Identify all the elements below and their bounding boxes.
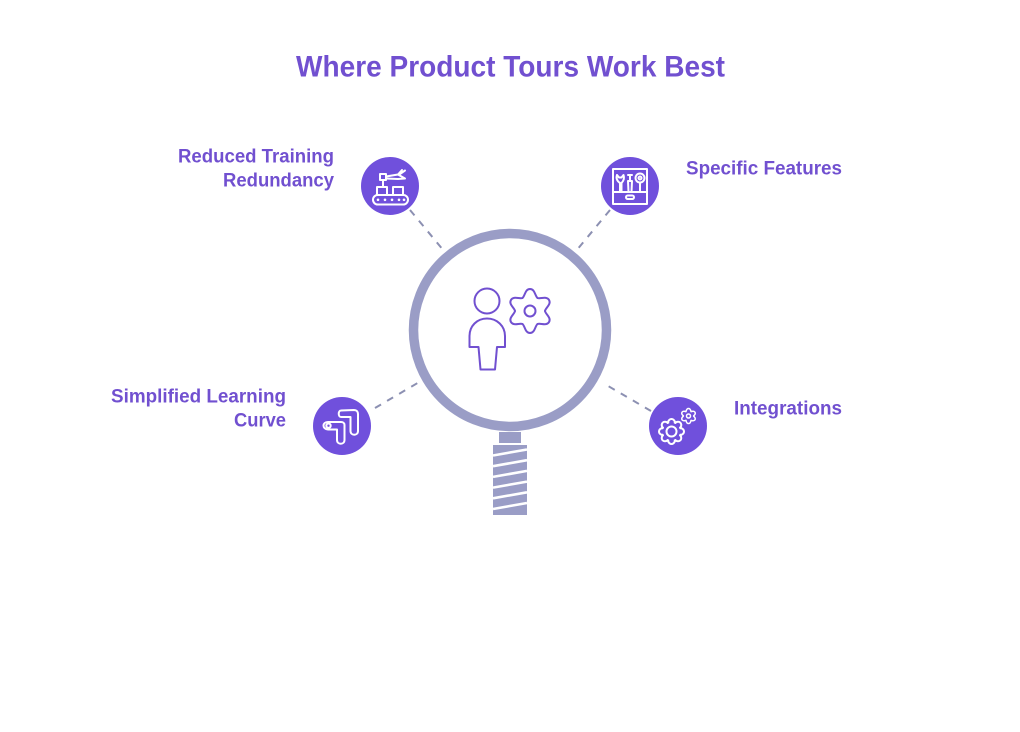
label: Redundancy bbox=[223, 170, 334, 192]
label: Reduced Training bbox=[178, 146, 334, 168]
label: Integrations bbox=[734, 398, 842, 420]
icon: central gear bbox=[507, 289, 553, 333]
label: Curve bbox=[234, 410, 286, 432]
title: Where Product Tours Work Best bbox=[296, 50, 725, 84]
item: Integrations bbox=[649, 397, 842, 455]
icon badge: gears bbox=[649, 397, 707, 455]
label: Specific Features bbox=[686, 158, 842, 180]
label: Simplified Learning bbox=[111, 386, 286, 408]
icon: person bbox=[470, 288, 505, 370]
item: Specific Features bbox=[601, 157, 842, 215]
magnifying glass bbox=[414, 234, 606, 515]
connector: top right bbox=[576, 210, 610, 251]
icon badge: learning curve arrows bbox=[313, 397, 371, 455]
icon badge: toolbox bbox=[601, 157, 659, 215]
threaded handle bbox=[493, 445, 527, 515]
icon badge: conveyor robot bbox=[361, 157, 419, 215]
label bbox=[111, 386, 286, 432]
label bbox=[178, 146, 334, 192]
connector: bottom left bbox=[375, 381, 421, 408]
connector: top left bbox=[410, 210, 444, 251]
lens ring bbox=[414, 234, 606, 426]
handle neck bbox=[499, 432, 521, 443]
item: Reduced Training Redundancy bbox=[178, 146, 419, 215]
connector: bottom right bbox=[603, 383, 651, 411]
item: Simplified Learning Curve bbox=[111, 386, 371, 455]
